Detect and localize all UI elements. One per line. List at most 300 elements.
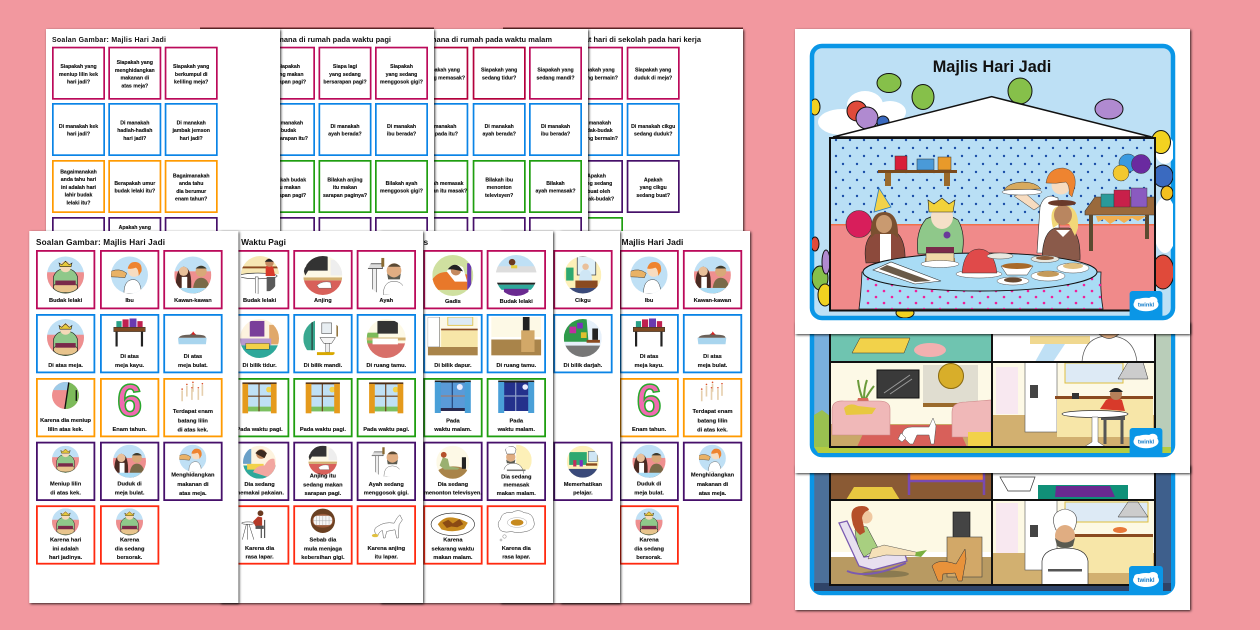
card: when cook — [416, 161, 467, 212]
card: who sleeps: sedang tidur? — [482, 75, 516, 81]
card row 4, sheet 1: Apakah yang — [119, 225, 151, 231]
card: teeth: mula menjaga — [304, 546, 343, 552]
card: where boy — [263, 104, 314, 155]
card: where father: ayah berada? — [482, 132, 516, 138]
card: what children do — [571, 161, 622, 212]
card: who eats: yang makan — [274, 72, 304, 78]
card: living room — [358, 315, 415, 372]
card: who serves: makanan di — [121, 76, 150, 82]
card: who sits: Siapakah yang — [635, 68, 671, 74]
card: how know age: enam tahun? — [175, 197, 207, 203]
card row 4, sheet 3 — [416, 218, 581, 269]
card: who blows candles: Siapakah yang — [60, 64, 97, 70]
card: who eats — [263, 48, 314, 99]
card: six candles: batang lilin — [697, 418, 728, 424]
card: night window: Pada — [509, 418, 524, 424]
morning scene: living room with dog — [830, 362, 992, 447]
card: who blows candles: meniup lilin kek — [59, 72, 98, 78]
card: dog eating: sarapan pagi. — [305, 491, 342, 497]
card: where food: hari jadi? — [180, 136, 203, 142]
card: evening window: Pada — [446, 418, 461, 424]
card: friends — [684, 251, 741, 308]
panel: morning house poster — [795, 310, 1190, 473]
card: how know birthday: Bagaimanakah — [60, 170, 97, 176]
card: who sleeps — [474, 48, 525, 99]
card: mother — [101, 251, 158, 308]
card: how know age: anda tahu — [179, 181, 203, 187]
card: watching television — [424, 443, 482, 500]
card: where cake — [53, 104, 104, 155]
heading: sheet B: Waktu Pagi — [241, 237, 286, 247]
card: night window — [488, 379, 545, 436]
card: getting dressed: Dia sedang — [244, 482, 275, 488]
card: living room: Di ruang tamu. — [366, 363, 407, 369]
heading: sheet 2: Soalan Gambar: Bagaimana di rumah pada waktu pagi — [197, 35, 391, 44]
card: six candles: Terdapat enam — [173, 409, 213, 415]
card: when dog: itu makan — [333, 185, 357, 191]
card: who serves — [109, 48, 160, 99]
card: round table: Di atas — [703, 354, 722, 360]
card: who cooks: Siapakah yang — [424, 68, 460, 74]
card: dog: Anjing — [314, 298, 332, 304]
card: morning window 2: Pada waktu pagi. — [300, 427, 346, 433]
card: girl — [424, 251, 482, 308]
card: his birthday — [37, 506, 94, 564]
card: morning window 2 — [294, 379, 352, 436]
card: cheering: bersorak. — [636, 555, 662, 561]
card: where food: jambak jemson — [171, 128, 210, 134]
card: wooden table: Di atas — [120, 354, 139, 360]
balloons and clouds background — [810, 74, 1177, 318]
card: living room — [488, 315, 545, 372]
heading: sheet C sliver: s — [424, 237, 428, 247]
card: how know birthday: lelaki itu? — [67, 200, 90, 206]
card: friends: Kawan-kawan — [174, 298, 212, 304]
card: green row — [571, 218, 622, 269]
house roof — [833, 97, 1152, 137]
card: teacher — [554, 251, 612, 308]
shelf with cards — [878, 156, 957, 186]
card: when cook: masakan itu masak? — [416, 189, 467, 195]
card: thought bubble: Karena dia — [502, 546, 532, 552]
gift table and balloons — [1085, 154, 1155, 251]
card: classroom — [554, 315, 612, 372]
card: where boy: budak — [281, 128, 296, 134]
card: when boy: Bilakah budak — [271, 178, 306, 184]
card: getting dressed: memakai pakaian. — [235, 491, 284, 497]
card: friends — [164, 251, 222, 308]
card: his birthday: ini adalah — [52, 546, 79, 552]
card: morning window 1: Pada waktu pagi. — [237, 427, 283, 433]
card: when boy: sarapan pagi? — [271, 193, 306, 199]
card: seated at table: Duduk di — [637, 482, 662, 488]
card: six years — [620, 375, 678, 436]
card: bedroom — [231, 315, 288, 372]
card: how old — [109, 161, 160, 212]
card: watching television: Dia sedang — [438, 482, 469, 488]
card: blowing reason — [37, 379, 94, 436]
card: six years: 6 — [637, 375, 662, 426]
card: when dog: sarapan paginya? — [323, 193, 367, 199]
card: where food: Di manakah — [177, 120, 206, 126]
card: serving food: makanan di — [177, 482, 209, 488]
card: boy in bath — [488, 251, 545, 308]
panel: front answer sheet B, morning — [220, 231, 423, 603]
card: cooking: memasak — [503, 483, 530, 489]
card: who else: bersarapan pagi? — [323, 80, 367, 86]
panel: front answer sheet E, birthday party copy — [560, 231, 750, 603]
panel: birthday party poster — [795, 29, 1190, 334]
night scene: kitchen with chef — [992, 500, 1155, 585]
panel: front answer sheet D, school — [500, 231, 620, 603]
heading: sheet 1: Soalan Gambar: Majlis Hari Jadi — [52, 37, 166, 44]
card: what children do: budak-budak? — [579, 197, 614, 203]
card: boy — [37, 251, 94, 308]
card: evening window — [424, 379, 482, 436]
card: teacher: Cikgu — [575, 298, 591, 304]
card: where father — [319, 104, 371, 155]
card: when boy — [263, 161, 314, 212]
card: watching pupils: Memerhatikan — [564, 482, 603, 488]
card: who serves: Siapakah yang — [117, 60, 153, 66]
panel: front answer sheet C, evening — [380, 231, 553, 603]
card: when tv: Bilakah ibu — [485, 178, 513, 184]
card: where father: Di manakah — [330, 124, 360, 130]
card: round table: meja bulat. — [698, 363, 728, 369]
card: classroom: Di bilik darjah. — [563, 363, 603, 369]
card: serving food: makanan di — [697, 482, 729, 488]
card: round table — [684, 315, 741, 372]
card: when tv: televisyen? — [485, 193, 513, 199]
card: round table: Di atas — [184, 354, 202, 360]
card: what children do: yang sedang — [581, 181, 612, 187]
card: where cake: Di manakah kek — [59, 124, 98, 130]
card: who bathes — [530, 48, 581, 99]
panel: front answer sheet A, birthday party — [29, 231, 238, 603]
card: who bathes: sedang mandi? — [536, 75, 575, 81]
card: where children play — [571, 104, 622, 155]
card: blowing candles — [37, 443, 94, 500]
card: how old: Berapakah umur — [114, 181, 155, 187]
card: blowing candles: Meniup lilin — [50, 482, 82, 488]
card: how know birthday: ini adalah hari — [61, 185, 96, 191]
card: six candles: di atas kek. — [697, 428, 728, 434]
card: when dog — [319, 161, 371, 212]
card: teeth: kebersihan gigi. — [301, 555, 345, 561]
card: where teacher sits: Di manakah cikgu — [631, 124, 675, 130]
card: where mother: Di manakah — [387, 124, 416, 130]
card: watching pupils — [554, 443, 612, 500]
card: how know birthday: anda tahu hari — [61, 177, 97, 183]
card: dinner plate: Karena — [443, 537, 463, 543]
card: mother — [620, 251, 678, 308]
card: bedroom: Di bilik tidur. — [243, 363, 277, 369]
card: dinner plate: makan malam. — [433, 555, 473, 561]
card: who blows candles: hari jadi? — [67, 80, 90, 86]
card: how know age: dia berumur — [176, 189, 206, 195]
card: seated at table — [620, 443, 678, 500]
card: how old: budak lelaki itu? — [114, 189, 155, 195]
card: what children do: dibuat oleh — [583, 189, 610, 195]
card: who sits: duduk di meja? — [634, 75, 672, 81]
card: where mother: ibu berada? — [541, 132, 570, 138]
card: where boy: Di manakah — [274, 120, 303, 126]
round table with food — [859, 247, 1103, 309]
card: where gifts: Di manakah — [120, 120, 149, 126]
card: father — [358, 251, 415, 308]
card: wooden table — [101, 315, 158, 372]
card: six candles: di atas kek. — [178, 428, 209, 434]
card: hungry dog: Karena anjing — [367, 546, 406, 552]
card: blowing reason: lilin atas kek. — [48, 427, 84, 433]
card: morning window 1 — [231, 379, 288, 436]
card: seated at table: meja bulat. — [634, 491, 664, 497]
card: when father cooks — [530, 161, 581, 212]
card: bathroom — [294, 315, 352, 372]
card: cooking — [488, 443, 545, 500]
card: living room: Di ruang tamu. — [496, 363, 537, 369]
card: who plays: sedang bermain? — [575, 75, 618, 81]
card: where teacher sits — [628, 104, 679, 155]
card: who gathers: berkumpul di — [175, 72, 208, 78]
party room walls — [830, 138, 1155, 311]
title: Majlis Hari Jadi — [933, 58, 1051, 76]
card: dog eating: Anjing itu — [310, 474, 337, 480]
card: dog — [294, 251, 352, 308]
card: brushing teeth: menggosok gigi. — [364, 491, 409, 497]
card: where food — [166, 104, 217, 155]
card: what teacher does: yang cikgu — [640, 185, 667, 191]
card: when tv: menonton — [487, 185, 512, 191]
card: when tv — [474, 161, 525, 212]
card: seated at table: Duduk di — [117, 482, 142, 488]
panel: back question sheet 3, evening — [350, 29, 588, 279]
card: serving food — [164, 443, 222, 500]
card: six years: 6 — [117, 375, 142, 426]
icon: twinkl logo, party poster — [1130, 291, 1162, 318]
card: on the table: Di atas meja. — [48, 363, 83, 369]
card: who eats: Siapakah — [277, 64, 300, 70]
card: dinner plate: sekarang waktu — [432, 546, 475, 552]
card: cooking: makan malam. — [497, 491, 536, 497]
heading: sheet 3: Soalan Gambar: Bagaimana di rumah pada waktu malam — [350, 35, 552, 44]
card: when boy: itu makan — [276, 185, 301, 191]
card: cheering — [101, 506, 158, 564]
card: night window: waktu malam. — [497, 427, 535, 433]
card: his birthday: hari jadinya. — [49, 555, 83, 561]
card: cheering: bersorak. — [117, 555, 143, 561]
card: who bathes: Siapakah yang — [537, 68, 574, 74]
card: serving food: Menghidangkan — [691, 473, 735, 479]
card: round table: meja bulat. — [178, 363, 208, 369]
card: how know birthday: lahir budak — [65, 192, 92, 198]
icon: twinkl logo, morning poster — [1130, 428, 1162, 455]
card: who serves: menghidangkan — [115, 68, 155, 74]
card: getting dressed — [231, 443, 288, 500]
card: dog eating — [294, 443, 352, 500]
card: who blows candles — [53, 48, 104, 99]
card: who eats: sarapan pagi? — [271, 80, 306, 86]
card: six candles: batang lilin — [178, 418, 208, 424]
card: where father — [474, 104, 525, 155]
card: kitchen — [424, 315, 482, 372]
card: cheering: Karena — [639, 537, 660, 543]
card: cheering: dia sedang — [115, 546, 145, 552]
heading: sheet 4: Soalan Gambar: Mengingat hari di sekolah pada hari kerja — [494, 35, 702, 44]
card: where children play: Di manakah — [582, 120, 611, 126]
night scene: upper rooms — [830, 473, 1155, 500]
card: where — [416, 104, 467, 155]
card row 4, sheet 1 — [53, 218, 217, 269]
card: seated at table — [101, 443, 158, 500]
card: thought bubble: rasa lapar. — [502, 554, 531, 560]
card: boy in bath: Budak lelaki — [500, 299, 533, 305]
card: bathroom: Di bilik mandi. — [304, 363, 343, 369]
card: mother: Ibu — [645, 298, 654, 304]
card: where mother: ibu berada? — [387, 132, 416, 138]
card: father: Ayah — [379, 298, 394, 304]
card: who else: yang sedang — [329, 72, 361, 78]
card: round table — [164, 315, 222, 372]
night scene: living room with woman and cat — [830, 500, 992, 585]
card: who brushes — [376, 48, 427, 99]
card: six candles — [164, 379, 222, 436]
card: six years: Enam tahun. — [113, 427, 147, 433]
card: who else: Siapa lagi — [333, 64, 358, 70]
card: when cook: Bilakah memasak — [420, 181, 464, 187]
heading: sheet E: Majlis Hari Jadi — [622, 237, 683, 247]
card: dog eating: sedang makan — [303, 483, 343, 489]
card: where mother — [376, 104, 427, 155]
card: who cooks: sedang memasak? — [419, 75, 465, 81]
card: serving food: atas meja. — [179, 491, 207, 497]
card: where father: Di manakah — [485, 124, 514, 130]
girl with party hat and balloon — [846, 188, 905, 263]
card: teeth: Sebab dia — [309, 537, 337, 543]
card: who brushes: yang sedang — [386, 72, 417, 78]
card row 4, sheet 2 — [263, 218, 427, 269]
card: when dog: Bilakah anjing — [327, 178, 363, 184]
card: what teacher does: Apakah — [644, 178, 663, 184]
card: kitchen: Di bilik dapur. — [434, 363, 472, 369]
card: who plays — [571, 48, 622, 99]
card: where gifts: hadiah-hadiah — [117, 128, 152, 134]
morning scene: upper rooms — [830, 334, 1155, 362]
card: his birthday: Karena hari — [50, 537, 82, 543]
card: how know age — [166, 161, 217, 212]
card: cooking: Dia sedang — [501, 475, 532, 481]
card: six candles — [684, 379, 741, 436]
panel: back question sheet 1, birthday party — [46, 29, 280, 279]
card: where children play: budak-budak — [580, 128, 613, 134]
card: cheering: Karena — [120, 537, 140, 543]
card: blowing reason: Karena dia meniup — [40, 418, 92, 424]
card: who brushes: menggosok gigi? — [380, 80, 423, 86]
card: when father: Bilakah ayah — [386, 181, 417, 187]
card: serving food: Menghidangkan — [171, 473, 215, 479]
card: girl: Gadis — [445, 299, 461, 305]
card: brushing teeth: Ayah sedang — [369, 482, 404, 488]
card: what teacher does — [628, 161, 679, 212]
panel: night house poster — [795, 450, 1190, 610]
card: teeth — [294, 506, 352, 564]
card: dinner plate — [424, 506, 482, 564]
card: wooden table — [620, 315, 678, 372]
card: when father — [376, 161, 427, 212]
card: thought bubble — [488, 506, 545, 564]
card: where children play: sedang bermain? — [575, 136, 618, 142]
card: where gifts: hari jadi? — [123, 136, 146, 142]
card: what teacher does: sedang buat? — [636, 193, 670, 199]
card: hungry boy: Karena dia — [245, 546, 275, 552]
card: who sits — [628, 48, 679, 99]
card: friends: Kawan-kawan — [694, 298, 732, 304]
card: who gathers: Siapakah yang — [173, 64, 209, 70]
card: when father cooks: Bilakah — [546, 181, 565, 187]
card: who sleeps: Siapakah yang — [481, 68, 517, 74]
card: where father: ayah berada? — [328, 132, 362, 138]
card: morning window 3: Pada waktu pagi. — [363, 427, 410, 433]
card: serving food — [684, 443, 741, 500]
icon: twinkl logo, night poster — [1129, 566, 1163, 594]
girl in plaid dress — [1042, 200, 1080, 262]
card: evening window: waktu malam. — [433, 427, 472, 433]
card: six years: Enam tahun. — [632, 427, 667, 433]
card: wooden table: meja kayu. — [115, 363, 145, 369]
card: morning window 3 — [358, 379, 415, 436]
card: when father: menggosok gigi? — [380, 189, 423, 195]
card: seated at table: meja bulat. — [115, 491, 145, 497]
card: mother: Ibu — [125, 298, 134, 304]
card: boy: Budak lelaki — [243, 298, 277, 304]
card: six candles: Terdapat enam — [692, 409, 733, 415]
card: what children do: Apakah — [587, 174, 606, 180]
card: brushing teeth — [358, 443, 415, 500]
panel: back question sheet 4, school — [494, 29, 743, 279]
card: boy: Budak lelaki — [49, 298, 83, 304]
card: where cake: hari jadi? — [67, 132, 90, 138]
card: how know age: Bagaimanakah — [173, 174, 210, 180]
card: when father cooks: ayah memasak? — [535, 189, 576, 195]
card: boy — [231, 251, 288, 308]
card: who cooks — [416, 48, 467, 99]
card: on the table — [37, 315, 94, 372]
card: who else — [319, 48, 371, 99]
card: watching pupils: pelajar. — [573, 491, 593, 497]
heading: sheet A: Soalan Gambar: Majlis Hari Jadi — [36, 238, 165, 247]
woman serving food — [1002, 168, 1075, 253]
card: who brushes: Siapakah — [390, 64, 413, 70]
card: watching television: menonton televisyen. — [424, 491, 482, 497]
card: wooden table: Di atas — [640, 354, 658, 360]
panel: back question sheet 2, morning — [197, 29, 434, 279]
card: hungry boy — [231, 506, 288, 564]
card: hungry dog: itu lapar. — [375, 554, 398, 560]
card: blowing candles: di atas kek. — [50, 491, 81, 497]
card: hungry dog — [358, 506, 415, 564]
card: where boy: bersarapan itu? — [269, 136, 308, 142]
card: who serves: atas meja? — [121, 83, 148, 89]
card: where mother — [530, 104, 581, 155]
card: where gifts — [109, 104, 160, 155]
card: where teacher sits: sedang duduk? — [634, 132, 672, 138]
card: who plays: Siapakah yang — [578, 68, 615, 74]
card: six years — [101, 375, 158, 436]
morning scene: kitchen with boy — [992, 362, 1155, 447]
card: who gathers: keliling meja? — [174, 80, 208, 86]
card: where mother: Di manakah — [541, 124, 570, 130]
card: who gathers — [166, 48, 217, 99]
